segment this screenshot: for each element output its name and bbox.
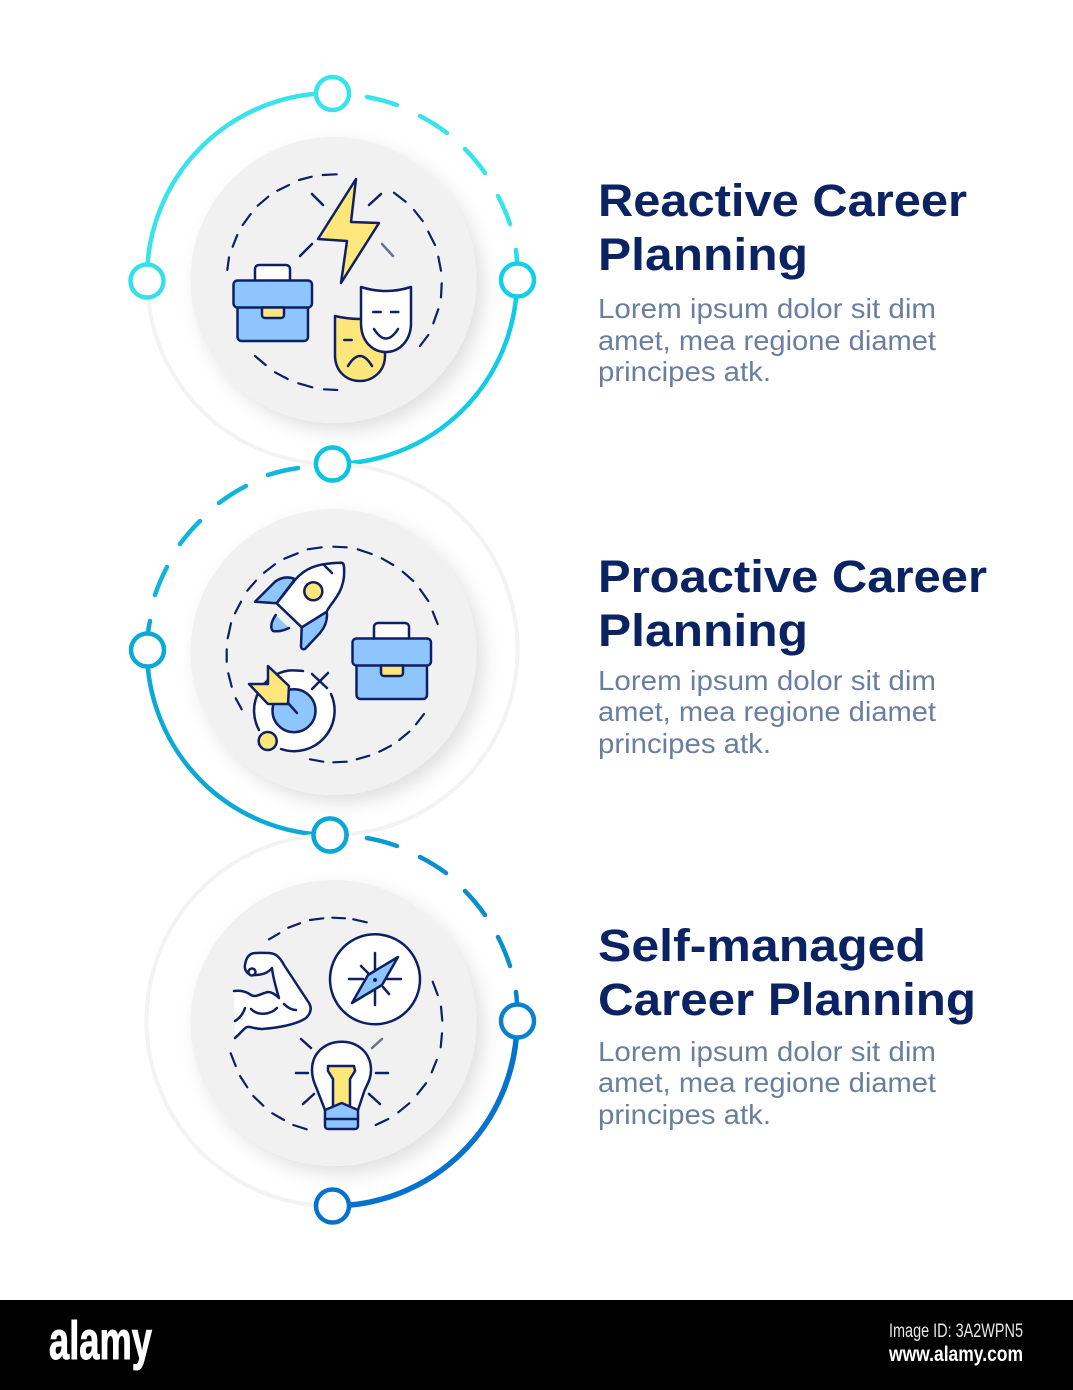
icon: flexed arm (234, 953, 311, 1038)
description 3: amet, mea regione diamet (598, 1067, 936, 1098)
description 2: amet, mea regione diamet (598, 696, 936, 727)
icon: briefcase (234, 265, 312, 341)
disc 3 (190, 880, 476, 1166)
dashed inner circle 3 (231, 918, 442, 1129)
ring 3 solid and dashed arcs (332, 838, 517, 1206)
description 1: principes atk. (598, 356, 771, 387)
description 3 (598, 1036, 936, 1130)
icon: rocket (255, 563, 344, 649)
ring 2 nodes (131, 448, 349, 852)
description 2 (598, 665, 936, 759)
icon: compass (330, 934, 420, 1024)
step 2: proactive career planning (131, 448, 518, 852)
footer logo: alamy (49, 1311, 152, 1371)
heading 2 (598, 551, 987, 656)
ring 3 nodes (314, 818, 534, 1222)
step 1: reactive career planning (130, 77, 534, 480)
ring 2 solid and dashed arcs (147, 468, 330, 835)
step 3: self-managed career planning (146, 818, 534, 1222)
icon: target with arrow (249, 666, 335, 751)
footer image id: Image ID: 3A2WPN5 (889, 1321, 1023, 1342)
description 1 (598, 293, 936, 387)
description 1: amet, mea regione diamet (598, 325, 936, 356)
dashed inner circle 1 (227, 174, 442, 390)
description 2: principes atk. (598, 728, 771, 759)
description 3: Lorem ipsum dolor sit dim (598, 1036, 936, 1067)
footer bar (0, 1300, 1073, 1390)
dashed inner circle 2 (227, 547, 438, 762)
icon: briefcase (352, 623, 431, 699)
ring 1 nodes (130, 77, 534, 480)
disc 2 (190, 509, 476, 795)
ring 3 grey arc (146, 835, 332, 1206)
description 1: Lorem ipsum dolor sit dim (598, 293, 936, 324)
heading 1: Reactive Career (598, 175, 967, 226)
heading 2: Proactive Career (598, 551, 987, 602)
ring 2 grey arc (332, 464, 518, 835)
description 3: principes atk. (598, 1099, 771, 1130)
disc 1 (190, 137, 476, 423)
footer url: www.alamy.com (888, 1343, 1023, 1366)
ring 1 solid and dashed arcs (147, 93, 517, 464)
heading 1: Planning (598, 229, 808, 280)
heading 2: Planning (598, 605, 808, 656)
description 2: Lorem ipsum dolor sit dim (598, 665, 936, 696)
heading 1 (598, 175, 967, 280)
icon: theatre masks (335, 287, 411, 381)
heading 3: Career Planning (598, 974, 976, 1025)
icon: lightning bolt (300, 179, 393, 283)
heading 3 (598, 920, 976, 1025)
heading 3: Self-managed (598, 920, 926, 971)
ring 1 grey arc (147, 281, 332, 464)
icon: light bulb (296, 1039, 388, 1129)
